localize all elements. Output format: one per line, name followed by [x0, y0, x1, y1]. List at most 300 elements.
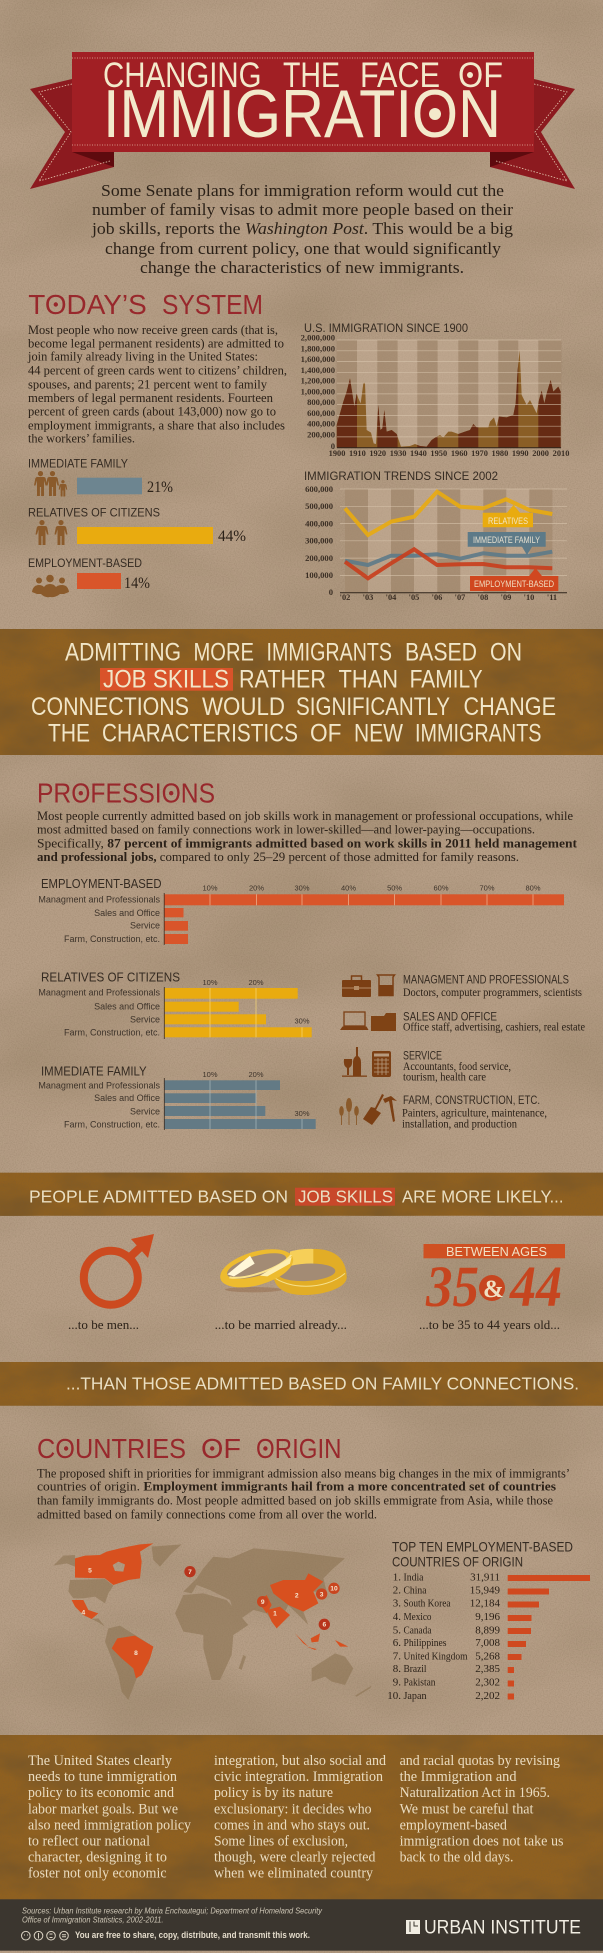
sources: Office of Immigration Statistics, 2002-2011.: [22, 1915, 164, 1925]
heading: professions: PROFESSIONS: [37, 778, 215, 809]
stat: relatives of citizens: [28, 506, 246, 545]
bar chart: employment-based: Sales and Office: [94, 908, 160, 918]
values: 7,008: [475, 1637, 500, 1649]
text block: green cards: join family already living in the United States:: [27, 349, 258, 364]
band: than those admitted: ...THAN THOSE ADMITTED BASED ON FAMILY CONNECTIONS.: [66, 1373, 579, 1393]
bars: [508, 1575, 590, 1700]
values: 2,385: [475, 1663, 500, 1675]
y axis labels: 100,000: [305, 570, 333, 580]
captions: ...to be men...: [68, 1317, 139, 1332]
tag: employment-based: EMPLOYMENT-BASED: [474, 579, 554, 590]
title line one: FACE: [360, 56, 440, 95]
stat: employment-based: EMPLOYMENT-BASED: [28, 556, 142, 570]
age stat: between ages 35 and 44: [424, 1244, 565, 1319]
bar chart: immediate family: Farm, Construction, etc.: [64, 1119, 160, 1129]
map pins and numbers: 7: [188, 1569, 192, 1576]
y axis labels: 1,000,000: [301, 386, 335, 396]
bar chart: immediate family: [38, 1063, 316, 1130]
heading: countries of origin: ORIGIN: [256, 1433, 342, 1464]
column three: [400, 1753, 564, 1866]
tag: immediate family: [468, 532, 546, 555]
country names: United Kingdom: [404, 1650, 468, 1662]
callout text: ON: [490, 640, 522, 667]
y axis labels: 1,800,000: [301, 343, 335, 353]
area series: [337, 350, 561, 448]
y axis labels: [305, 484, 333, 597]
bar chart: employment-based: 40%: [341, 884, 356, 893]
y axis labels: 1,200,000: [301, 376, 335, 386]
text block: green cards: [27, 322, 287, 446]
values: [470, 1571, 500, 1702]
title line one: THE: [283, 56, 340, 95]
y axis labels: 800,000: [307, 397, 335, 407]
column one: character, designing it to: [28, 1850, 167, 1866]
country names: [404, 1571, 468, 1702]
ranks: 1.: [393, 1571, 401, 1583]
tag: employment-based: [470, 568, 558, 591]
title line two: IMMIGRATION: [103, 76, 501, 152]
column two: policy is by its nature: [214, 1785, 333, 1801]
decade bands: [337, 340, 561, 448]
column three: Naturalization Act in 1965.: [400, 1785, 550, 1801]
text block: countries: countries of origin. Employment immigrants hail from a more concentrated set of countries: [37, 1479, 556, 1494]
x axis labels: 1930: [390, 449, 406, 458]
text block: green cards: members of legal permanent residents. Fourteen: [28, 390, 273, 405]
callout text: RATHER: [239, 667, 326, 694]
bar chart: immediate family: 20%: [248, 1070, 264, 1079]
right ribbon tail: [490, 79, 575, 189]
bar chart: immediate family: 30%: [294, 1109, 310, 1118]
ranks: [387, 1571, 401, 1702]
values: 2,202: [475, 1690, 500, 1702]
icon: briefcase and beaker: [342, 975, 394, 997]
bar chart: employment-based: 20%: [249, 884, 264, 893]
left ribbon tail: [30, 79, 114, 189]
country names: China: [404, 1585, 427, 1597]
text block: countries: [37, 1465, 570, 1521]
y axis labels: 500,000: [305, 501, 333, 511]
age stat: between ages 35 and 44: BETWEEN AGES: [446, 1245, 547, 1259]
values: 2,302: [475, 1677, 500, 1689]
callout text: THE: [48, 721, 90, 748]
y axis labels: 200,000: [305, 553, 333, 563]
country names: Pakistan: [404, 1677, 436, 1689]
bar chart: relatives of citizens: Managment and Professionals: [38, 988, 160, 998]
bar chart: relatives of citizens: Farm, Construction, etc.: [64, 1027, 160, 1037]
legend: service: Accountants, food service,: [403, 1061, 511, 1073]
year bands: [345, 489, 552, 593]
legend: farm, construction, etc.: FARM, CONSTRUCTION, ETC.: [403, 1095, 540, 1107]
bar chart: employment-based: Managment and Professionals: [38, 895, 160, 905]
footer: [0, 1899, 603, 1951]
callout text: CHANGE: [464, 694, 556, 721]
job skills highlight: [295, 1188, 395, 1206]
callout text: ADMITTING: [65, 640, 181, 667]
x axis labels: '06: [432, 593, 442, 602]
stat: immediate family: IMMEDIATE FAMILY: [28, 456, 128, 470]
bar chart: relatives of citizens: [38, 970, 312, 1039]
heading: today's system: SYSTEM: [162, 289, 263, 320]
x axis labels: 1910: [349, 449, 366, 458]
ranks: 3.: [393, 1598, 401, 1610]
ranks: 2.: [393, 1585, 401, 1597]
tag: relatives: RELATIVES: [488, 516, 528, 527]
icon: two people: [36, 520, 68, 545]
country names: Mexico: [404, 1611, 432, 1623]
x axis labels: 2010: [553, 449, 569, 458]
ranks: 10.: [387, 1690, 401, 1702]
text block: professions: Most people currently admitted based on job skills work in management or professional occupations, while: [37, 808, 573, 823]
x axis labels: [340, 593, 557, 602]
bar chart: employment-based: EMPLOYMENT-BASED: [41, 876, 162, 891]
text block: professions: [37, 808, 578, 864]
column three: back to the old days.: [400, 1850, 514, 1866]
legend: managment and professionals: MANAGMENT AND PROFESSIONALS: [403, 974, 569, 986]
heading: countries of origin: COUNTRIES: [37, 1433, 186, 1464]
country names: Philippines: [404, 1637, 446, 1649]
text block: professions: most admitted based on family connections work in lower-skilled—and lower-paying—occupations.: [37, 821, 535, 836]
column two: though, were clearly rejected: [214, 1850, 376, 1866]
column three: the Immigration and: [400, 1769, 517, 1785]
callout text: FAMILY: [410, 667, 483, 694]
ranks: 9.: [393, 1677, 401, 1689]
sources: Sources: Urban Institute research by Maria Enchautegui; Department of Homeland Security: [22, 1906, 323, 1916]
text block: professions: Specifically, 87 percent of immigrants admitted based on work skills in 2011 held management: [37, 835, 578, 850]
ranks: 6.: [393, 1637, 401, 1649]
bar chart: immediate family: Service: [130, 1106, 160, 1116]
chart: immigration trends since 2002: [304, 469, 567, 602]
logo: urban institute: URBAN INSTITUTE: [424, 1917, 581, 1938]
bar chart: employment-based: Farm, Construction, etc.: [64, 934, 160, 944]
y axis labels: [301, 332, 335, 451]
captions: ...to be married already...: [215, 1317, 347, 1332]
y axis labels: 0: [329, 587, 333, 597]
legend: sales and office: SALES AND OFFICE: [403, 1011, 497, 1023]
column two: civic integration. Immigration: [214, 1769, 383, 1785]
heading: today's system: TODAY’S: [28, 289, 147, 320]
map pins and numbers: 5: [88, 1567, 92, 1574]
x axis labels: 2000: [532, 449, 549, 458]
text block: professions: and professional jobs, compared to only 25–29 percent of those admitted for family reasons.: [37, 849, 519, 864]
column one: needs to tune immigration: [28, 1769, 177, 1785]
x axis labels: '11: [547, 593, 557, 602]
x axis labels: 1980: [492, 449, 508, 458]
bar chart: employment-based: [38, 876, 564, 945]
stat: immediate family: [28, 456, 173, 496]
column one: [28, 1753, 191, 1882]
callout text: CHARACTERISTICS: [102, 721, 298, 748]
stat: relatives of citizens: RELATIVES OF CITIZENS: [28, 506, 160, 520]
icon: wheat, brush and hammer: [339, 1094, 397, 1125]
text block: green cards: percent of green cards (about 143,000) now go to: [28, 404, 276, 419]
big numbers: &: [483, 1276, 504, 1303]
line: immediate family: [345, 552, 552, 565]
x axis labels: '07: [455, 593, 465, 602]
bar chart: relatives of citizens: 20%: [248, 978, 264, 987]
bar chart: relatives of citizens: RELATIVES OF CITIZENS: [41, 970, 180, 985]
icon: creative commons badges: [22, 1931, 68, 1940]
section: today's system: [27, 289, 287, 597]
callout text: SIGNIFICANTLY: [296, 694, 450, 721]
highlighted countries: [72, 1543, 348, 1678]
values: 12,184: [470, 1598, 500, 1610]
bar chart: relatives of citizens: Service: [130, 1014, 160, 1024]
values: 8,899: [475, 1624, 500, 1636]
ranking: top ten employment-based countries: COUNTRIES OF ORIGIN: [392, 1554, 523, 1570]
between ages label: [424, 1244, 565, 1258]
y axis labels: 0: [331, 441, 335, 451]
text block: countries: The proposed shift in priorities for immigrant admission also means big changes in the mix of immigrants’: [37, 1465, 570, 1480]
map pins and numbers: [81, 1566, 340, 1657]
y axis labels: 200,000: [307, 429, 335, 439]
bar chart: employment-based: 50%: [387, 884, 402, 893]
legend: sales and office: [340, 1011, 585, 1034]
bar chart: immediate family: 10%: [202, 1070, 218, 1079]
band text: ARE MORE LIKELY...: [402, 1186, 564, 1206]
legend: service: [342, 1047, 511, 1083]
band: people admitted based on job skills: [0, 1173, 603, 1216]
callout text: [31, 640, 556, 748]
column three: and racial quotas by revising: [400, 1753, 560, 1769]
country names: Brazil: [404, 1663, 426, 1675]
y axis labels: 600,000: [305, 484, 333, 494]
x axis labels: 1940: [410, 449, 427, 458]
heading: countries of origin: [37, 1433, 342, 1464]
heading: today's system: [28, 289, 263, 320]
intro paragraph: change the characteristics of new immigrants.: [140, 258, 464, 277]
callout text: CONNECTIONS: [31, 694, 189, 721]
tag: relatives: [483, 505, 533, 527]
land masses: [53, 1544, 372, 1700]
callout text: THAN: [338, 667, 398, 694]
column one: also need immigration policy: [28, 1817, 191, 1833]
legend: service: tourism, health care: [403, 1071, 486, 1083]
values: 5,268: [475, 1650, 500, 1662]
map pins and numbers: 9: [261, 1599, 265, 1606]
bar chart: employment-based: Service: [130, 921, 160, 931]
x axis labels: '08: [478, 593, 488, 602]
right ring: [273, 1249, 347, 1295]
sources: [22, 1906, 323, 1925]
text block: green cards: the workers’ families.: [28, 431, 135, 446]
column three: employment-based: [400, 1817, 507, 1833]
title banner: [30, 52, 575, 189]
column two: [214, 1753, 386, 1882]
column one: The United States clearly: [28, 1753, 172, 1769]
y axis labels: 1,600,000: [301, 354, 335, 364]
big numbers: 44: [509, 1254, 562, 1319]
captions: [68, 1317, 560, 1332]
big numbers: [425, 1254, 562, 1319]
legend: farm, construction, etc.: installation, and production: [402, 1118, 517, 1130]
bar chart: relatives of citizens: Sales and Office: [94, 1001, 160, 1011]
map pins and numbers: 3: [320, 1591, 324, 1598]
intro paragraph: Some Senate plans for immigration reform would cut the: [101, 181, 504, 200]
section: countries of origin: [37, 1433, 590, 1702]
map pins and numbers: 2: [295, 1592, 299, 1599]
map pins and numbers: 6: [322, 1622, 326, 1629]
big numbers: 35: [425, 1254, 479, 1319]
y axis labels: 600,000: [307, 408, 335, 418]
text block: green cards: employment immigrants, a share that also includes: [28, 417, 285, 432]
icon: male symbol: [84, 1234, 154, 1305]
bar chart: employment-based: 10%: [202, 884, 218, 893]
x axis labels: 1950: [430, 449, 447, 458]
icon: family: [34, 471, 67, 496]
bar chart: immediate family: Sales and Office: [94, 1093, 160, 1103]
ranks: 4.: [393, 1611, 401, 1623]
legend: farm, construction, etc.: [339, 1094, 547, 1130]
chart: immigration trends since 2002: IMMIGRATION TRENDS SINCE 2002: [304, 469, 498, 483]
x axis labels: '05: [409, 593, 419, 602]
ranks: 8.: [393, 1663, 401, 1675]
bar chart: relatives of citizens: 10%: [202, 978, 218, 987]
tag: immediate family: IMMEDIATE FAMILY: [473, 535, 541, 546]
legend: farm, construction, etc.: Painters, agriculture, maintenance,: [402, 1108, 547, 1120]
x axis labels: 1960: [451, 449, 468, 458]
column one: foster not only economic: [28, 1866, 167, 1882]
band: than those admitted: [0, 1362, 603, 1406]
bar chart: relatives of citizens: 30%: [294, 1017, 310, 1026]
values: 31,911: [470, 1571, 500, 1583]
bar chart: employment-based: 80%: [525, 884, 541, 893]
callout text: WOULD: [202, 694, 285, 721]
chart: u.s. immigration since 1900: U.S. IMMIGRATION SINCE 1900: [304, 321, 468, 335]
callout text: MORE: [194, 640, 254, 667]
column two: integration, but also social and: [214, 1753, 386, 1769]
legend: managment and professionals: Doctors, computer programmers, scientists: [403, 987, 582, 999]
bar chart: immediate family: IMMEDIATE FAMILY: [41, 1063, 147, 1078]
band text: JOB SKILLS: [298, 1186, 393, 1206]
map pins and numbers: 8: [134, 1650, 138, 1657]
values: 15,949: [470, 1585, 500, 1597]
captions: ...to be 35 to 44 years old...: [419, 1317, 560, 1332]
stat: relatives of citizens: 44%: [218, 528, 246, 545]
intro paragraph: change from current policy, one that would significantly: [105, 239, 502, 258]
legend: service: SERVICE: [403, 1050, 442, 1062]
icon: wedding rings: [216, 1242, 347, 1295]
text block: countries: than family immigrants do. Most people admitted based on job skills emmigrate from Asia, while those: [37, 1493, 553, 1508]
stat: employment-based: [28, 556, 150, 597]
country names: India: [404, 1571, 424, 1583]
intro paragraph: job skills, reports the Washington Post . This would be a big: [91, 219, 514, 238]
x axis labels: 1970: [471, 449, 488, 458]
callout text: OF: [310, 721, 342, 748]
x axis labels: 1990: [512, 449, 529, 458]
country names: Japan: [404, 1690, 427, 1702]
column one: to reflect our national: [28, 1833, 150, 1849]
stat: employment-based: 14%: [124, 575, 150, 592]
line: relatives: [345, 492, 552, 535]
text block: green cards: become legal permanent residents) are admitted to: [28, 335, 284, 350]
y axis labels: 1,400,000: [301, 365, 335, 375]
text block: green cards: 44 percent of green cards went to citizens’ children,: [28, 363, 287, 378]
values: 9,196: [475, 1611, 500, 1623]
ribbon main panel: [72, 52, 534, 152]
column two: Some lines of exclusion,: [214, 1833, 348, 1849]
left ring: [216, 1242, 297, 1295]
text block: countries: admitted based on family connections come from all over the world.: [37, 1506, 377, 1521]
heading: countries of origin: OF: [201, 1433, 241, 1464]
gridlines: [340, 489, 567, 575]
y axis labels: 2,000,000: [301, 332, 335, 342]
job skills highlight: [100, 668, 233, 691]
chart: u.s. immigration since 1900: [301, 321, 569, 458]
x axis labels: [329, 449, 569, 458]
callout text: IMMIGRANTS: [415, 721, 542, 748]
icon: laptop and folder: [340, 1012, 396, 1031]
title line one: [103, 56, 503, 95]
map pins and numbers: 1: [273, 1611, 277, 1618]
intro paragraph: [91, 181, 514, 277]
icon: workers: [32, 575, 69, 597]
x axis labels: '03: [363, 593, 373, 602]
x axis labels: '10: [524, 593, 534, 602]
x axis labels: 1900: [329, 449, 345, 458]
x axis labels: '09: [501, 593, 511, 602]
closing panel: brown band: [0, 1735, 603, 1900]
callout text: BASED: [405, 640, 477, 667]
callout band: admitting more immigrants: [0, 629, 603, 755]
section: professions: [37, 778, 585, 1130]
column one: labor market goals. But we: [28, 1801, 178, 1817]
y axis labels: 400,000: [307, 419, 335, 429]
column three: immigration does not take us: [400, 1833, 564, 1849]
band text: [29, 1186, 564, 1206]
legend: managment and professionals: [342, 974, 582, 999]
callout text: IMMIGRANTS: [266, 640, 392, 667]
y axis labels: 400,000: [305, 518, 333, 528]
column two: exclusionary: it decides who: [214, 1801, 372, 1817]
ranks: 7.: [393, 1650, 401, 1662]
text block: green cards: Most people who now receive green cards (that is,: [28, 322, 278, 337]
license text: You are free to share, copy, distribute, and transmit this work.: [75, 1930, 310, 1940]
map pins and numbers: 4: [81, 1610, 85, 1617]
ranking: top ten employment-based countries: TOP TEN EMPLOYMENT-BASED: [392, 1539, 573, 1555]
world map: [53, 1543, 372, 1700]
legend: sales and office: Office staff, advertising, cashiers, real estate: [403, 1022, 585, 1034]
x axis labels: '04: [386, 593, 397, 602]
column three: We must be careful that: [400, 1801, 534, 1817]
intro paragraph: number of family visas to admit more people based on their: [92, 200, 513, 219]
x axis labels: '02: [340, 593, 350, 602]
title line one: CHANGING: [103, 56, 262, 95]
line: employment-based: [345, 549, 552, 578]
map pins and numbers: 10: [330, 1586, 338, 1593]
gridlines: [337, 340, 561, 437]
text block: green cards: spouses, and parents; 21 percent went to family: [28, 376, 267, 391]
bar chart: immediate family: Managment and Professionals: [38, 1080, 160, 1090]
country names: South Korea: [404, 1598, 451, 1610]
x axis labels: 1920: [369, 449, 386, 458]
bar chart: employment-based: 70%: [479, 884, 495, 893]
callout text: JOB SKILLS: [103, 667, 229, 694]
ranking: top ten employment-based countries: [387, 1539, 590, 1702]
band text: PEOPLE ADMITTED BASED ON: [29, 1186, 288, 1206]
callout text: NEW: [354, 721, 404, 748]
country names: Canada: [404, 1624, 432, 1636]
title line one: OF: [458, 56, 503, 95]
stat: immediate family: 21%: [147, 479, 173, 496]
column two: comes in and who stays out.: [214, 1817, 370, 1833]
icon: wine and calculator: [342, 1047, 391, 1077]
column two: when we eliminated country: [214, 1866, 373, 1882]
column one: policy to its economic and: [28, 1785, 174, 1801]
bar chart: employment-based: 30%: [294, 884, 310, 893]
bar chart: employment-based: 60%: [433, 884, 449, 893]
ranks: 5.: [393, 1624, 401, 1636]
y axis labels: 300,000: [305, 536, 333, 546]
